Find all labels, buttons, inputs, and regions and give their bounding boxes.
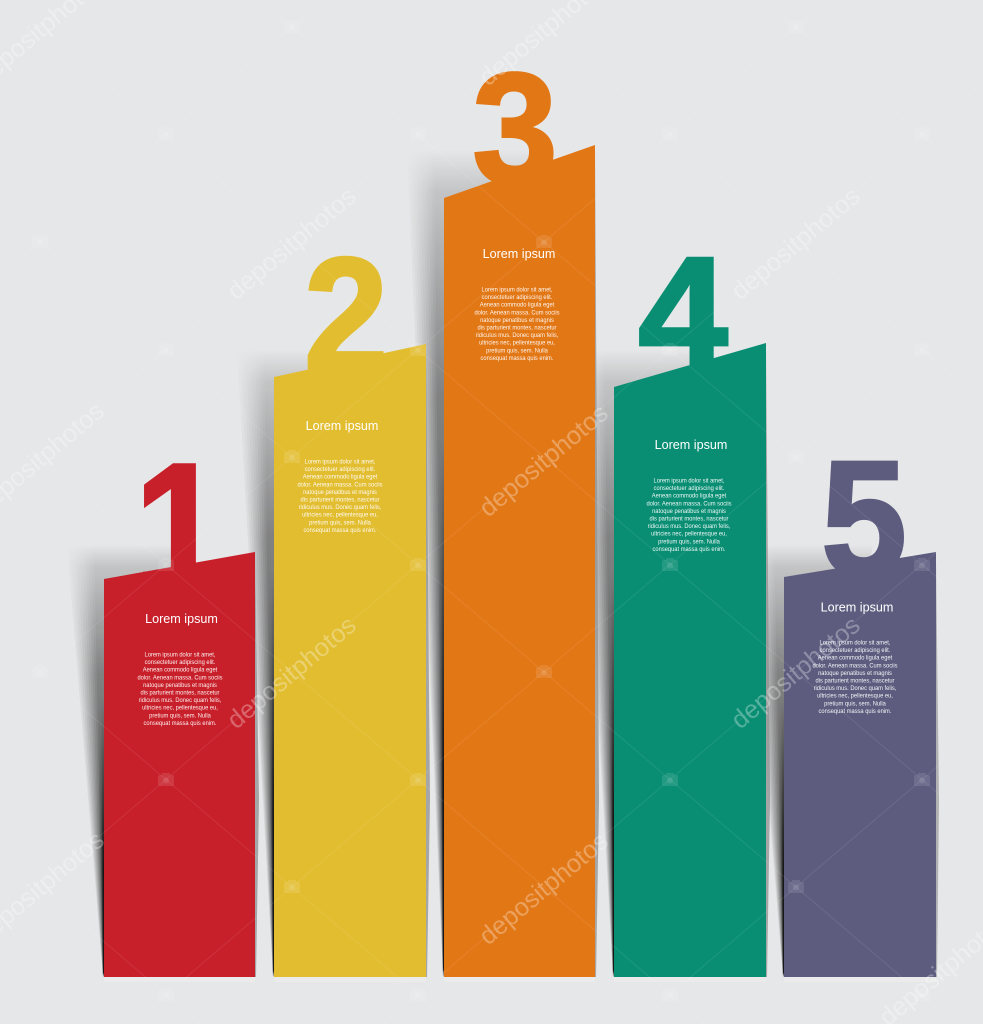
number 3: 3 bbox=[472, 40, 558, 216]
bar 1 body text: consequat massa quis enim. bbox=[144, 720, 217, 727]
bar 1 body text: consectetuer adipiscing elit. bbox=[145, 659, 216, 666]
bar 5 body text: consequat massa quis enim. bbox=[819, 708, 892, 715]
bar 3 body text: Lorem ipsum dolor sit amet, bbox=[482, 286, 553, 294]
panel: bar 4 green bbox=[614, 224, 766, 977]
bar 4 body text: consectetuer adipiscing elit. bbox=[654, 485, 725, 492]
bar 5 body text: Lorem ipsum dolor sit amet, bbox=[820, 639, 891, 647]
bar 5 body text: ultricies nec, pellentesque eu, bbox=[817, 692, 893, 700]
bar 2 shape bbox=[274, 344, 426, 977]
bar 3 body text: consequat massa quis enim. bbox=[481, 355, 554, 362]
panel: bar 1 red bbox=[104, 424, 255, 977]
bar 4 body text: Aenean commodo ligula eget bbox=[652, 492, 727, 500]
bar 5 body text: dolor. Aenean massa. Cum sociis bbox=[812, 662, 898, 669]
bar 2 heading: Lorem ipsum bbox=[306, 419, 378, 433]
bar 1 shape bbox=[104, 552, 255, 977]
bar 3 body text: ultricies nec, pellentesque eu, bbox=[479, 339, 555, 347]
bar 2 body text: consectetuer adipiscing elit. bbox=[305, 466, 376, 473]
bar 1 body text: Aenean commodo ligula eget bbox=[143, 666, 218, 674]
bar 4 body text: pretium quis, sem. Nulla bbox=[658, 538, 720, 545]
bar 1 body text: Lorem ipsum dolor sit amet, bbox=[145, 651, 216, 659]
watermark overlay: depositphotos bbox=[222, 182, 362, 306]
bar 1 body text: pretium quis, sem. Nulla bbox=[149, 712, 211, 719]
number 4: 4 bbox=[638, 224, 728, 401]
bar 1 heading: Lorem ipsum bbox=[145, 612, 218, 626]
bar 5 body text: pretium quis, sem. Nulla bbox=[824, 700, 886, 707]
bar 4 body text: Lorem ipsum dolor sit amet, bbox=[654, 477, 725, 485]
bar 5 body text: consectetuer adipiscing elit. bbox=[820, 647, 891, 654]
watermark overlay: depositphotos bbox=[726, 182, 866, 306]
bar 2 body text: ridiculus mus. Donec quam felis, bbox=[299, 504, 382, 511]
bar 2 body text: dolor. Aenean massa. Cum sociis bbox=[297, 481, 383, 488]
bar 4 shape bbox=[614, 343, 766, 977]
bar 5 body text: natoque penatibus et magnis bbox=[818, 670, 892, 677]
bar 3 body text: Aenean commodo ligula eget bbox=[480, 301, 555, 309]
bar 4 body text: dis parturient montes, nascetur bbox=[650, 515, 728, 523]
bar 1 body text: ridiculus mus. Donec quam felis, bbox=[139, 697, 222, 704]
bar 5 heading: Lorem ipsum bbox=[821, 600, 893, 614]
bar 3 body text: pretium quis, sem. Nulla bbox=[486, 347, 548, 354]
bar 5 body text: ridiculus mus. Donec quam felis, bbox=[814, 685, 897, 692]
bar 5 shape bbox=[784, 552, 936, 977]
watermark overlay: depositphotos bbox=[726, 611, 866, 735]
panel: bar 2 yellow bbox=[274, 225, 426, 977]
bar 3 body text: natoque penatibus et magnis bbox=[480, 317, 554, 324]
number 1: 1 bbox=[134, 424, 225, 631]
bar 3 body text: dolor. Aenean massa. Cum sociis bbox=[474, 309, 560, 316]
bar 4 body text: ultricies nec, pellentesque eu, bbox=[651, 530, 727, 538]
watermark overlay: depositphotos bbox=[474, 827, 614, 951]
bar 3 body text: ridiculus mus. Donec quam felis, bbox=[476, 332, 559, 339]
bar 2 body text: ultricies nec, pellentesque eu, bbox=[302, 511, 378, 519]
panel: bar 5 purple bbox=[784, 427, 936, 977]
bar 3 body text: consectetuer adipiscing elit. bbox=[482, 294, 553, 301]
bar 1 body text: ultricies nec, pellentesque eu, bbox=[142, 704, 218, 712]
bar cast shadows bbox=[67, 150, 939, 982]
bar 3 body text: dis parturient montes, nascetur bbox=[478, 324, 556, 332]
bar 2 body text: dis parturient montes, nascetur bbox=[301, 496, 379, 504]
bar 2 body text: consequat massa quis enim. bbox=[304, 527, 377, 534]
bar 4 heading: Lorem ipsum bbox=[655, 438, 727, 452]
bar 4 body text: consequat massa quis enim. bbox=[653, 546, 726, 553]
bar 2 body text: Lorem ipsum dolor sit amet, bbox=[305, 458, 376, 466]
number 5: 5 bbox=[821, 427, 907, 610]
panel: bar 3 orange bbox=[444, 40, 595, 977]
bar 2 body text: pretium quis, sem. Nulla bbox=[309, 519, 371, 526]
bar 2 body text: Aenean commodo ligula eget bbox=[303, 473, 378, 481]
bar 1 body text: dis parturient montes, nascetur bbox=[141, 689, 219, 697]
bar 1 body text: natoque penatibus et magnis bbox=[143, 682, 217, 689]
bar 1 body text: dolor. Aenean massa. Cum sociis bbox=[137, 674, 223, 681]
bar 3 heading: Lorem ipsum bbox=[483, 247, 555, 261]
bar 4 body text: ridiculus mus. Donec quam felis, bbox=[648, 523, 731, 530]
bar 3 shape bbox=[444, 145, 595, 977]
bar 4 body text: natoque penatibus et magnis bbox=[652, 508, 726, 515]
watermark overlay: depositphotos bbox=[222, 611, 362, 735]
number 2: 2 bbox=[304, 225, 388, 406]
bar 2 body text: natoque penatibus et magnis bbox=[303, 489, 377, 496]
watermark overlay: depositphotos bbox=[474, 399, 614, 523]
bar 5 body text: dis parturient montes, nascetur bbox=[816, 677, 894, 685]
bar 4 body text: dolor. Aenean massa. Cum sociis bbox=[646, 500, 732, 507]
bar 5 body text: Aenean commodo ligula eget bbox=[818, 654, 893, 662]
